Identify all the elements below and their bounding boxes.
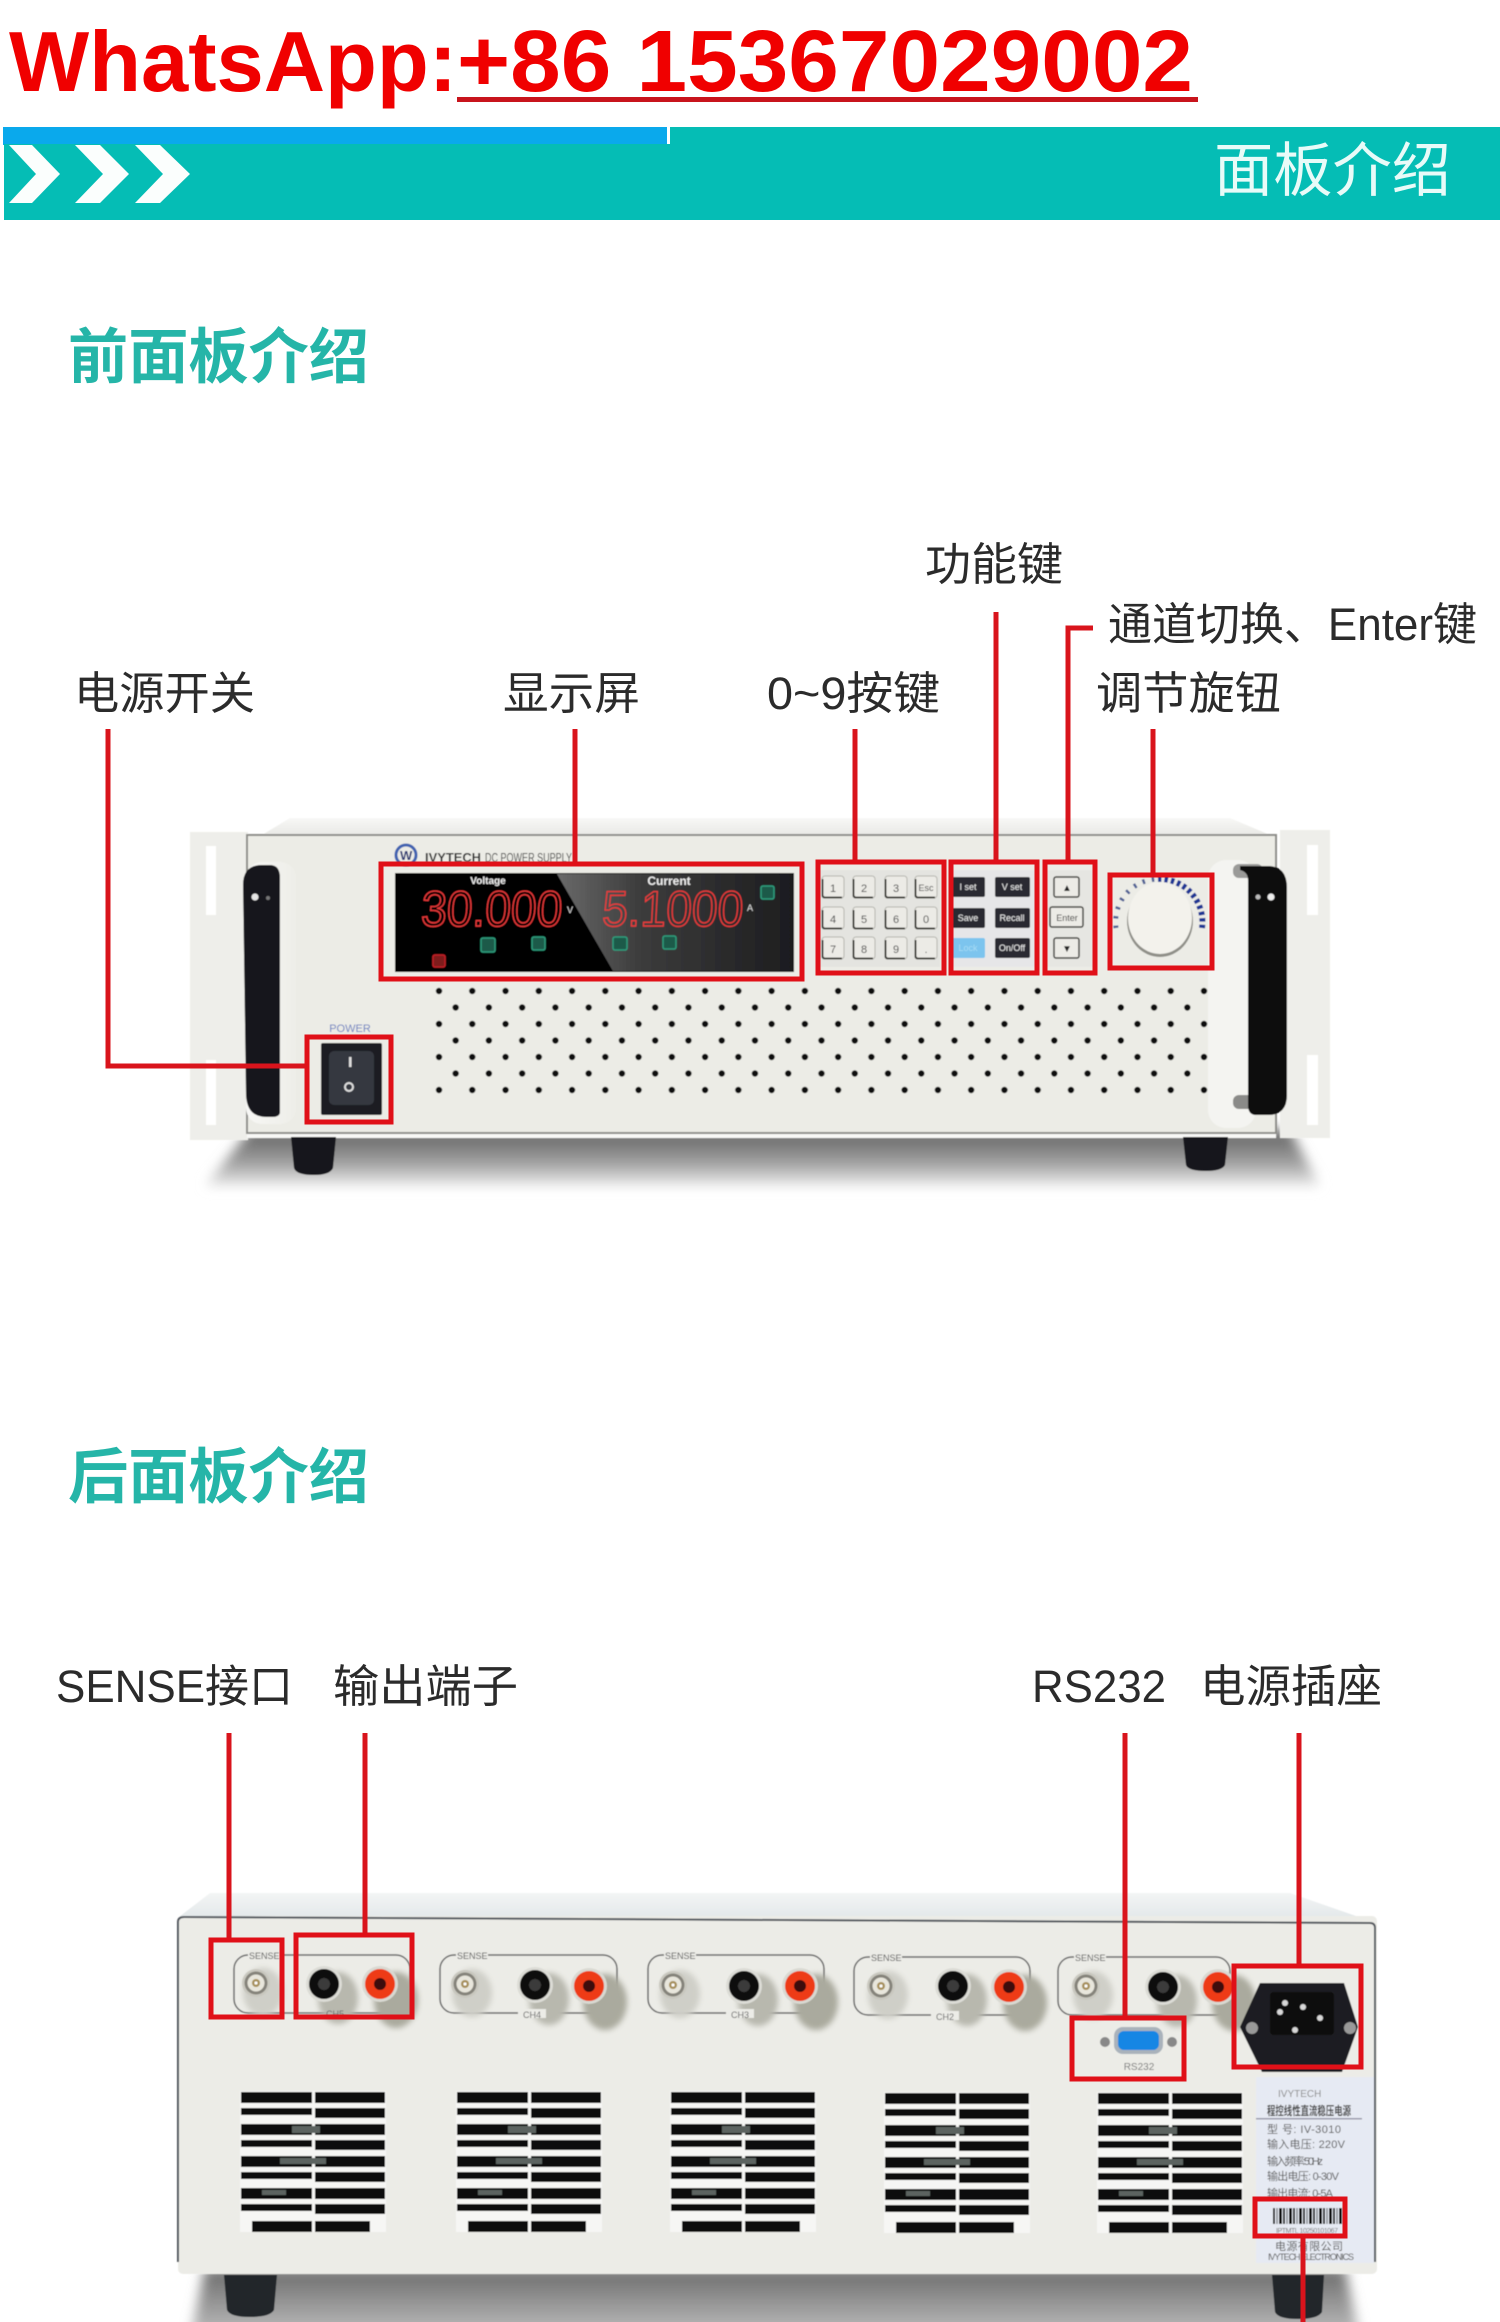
left handle: [243, 862, 296, 1124]
power label: POWER: [329, 1023, 371, 1035]
rating label: 输入频率: 50Hz: [1267, 2154, 1323, 2168]
function keys: V set: [1002, 882, 1023, 892]
rating label: [1256, 2077, 1374, 2263]
front right foot: [1183, 1137, 1228, 1171]
rear device body: [178, 1916, 1377, 2274]
rs232 connector: [1100, 2027, 1177, 2073]
label: power socket: 电源插座: [1200, 1661, 1382, 1712]
rear device top lid: [179, 1893, 1376, 1923]
ventilation dots: [430, 982, 1212, 1098]
channel 5 terminals: [234, 1950, 418, 2028]
channel 1 terminals: SENSE: [1075, 1953, 1106, 1963]
heading: rear panel: 后面板介绍: [68, 1444, 369, 1511]
rating label: IVYTECH: [1278, 2089, 1321, 2100]
navigation keys: Enter: [1056, 913, 1078, 923]
label: power switch: 电源开关: [74, 668, 255, 719]
keypad: 1: [830, 883, 836, 895]
front panel device photo: [190, 818, 1330, 1186]
keypad: 2: [861, 883, 867, 895]
keypad: 5: [861, 914, 867, 926]
channel 5 terminals: CH5: [326, 2009, 344, 2019]
rear vent 4: [884, 2092, 1030, 2233]
power socket: [1240, 1983, 1358, 2072]
channel 4 terminals: [440, 1950, 627, 2030]
label: function keys: 功能键: [925, 539, 1063, 590]
icon: banner chevrons: [9, 145, 190, 203]
label: adjust knob: 调节旋钮: [1096, 668, 1281, 719]
function keys: Recall: [999, 913, 1025, 923]
right handle: [1208, 860, 1287, 1128]
function keys: Lock: [958, 943, 978, 953]
front device faceplate: [247, 835, 1276, 1133]
heading: front panel: 前面板介绍: [68, 324, 369, 391]
label: output terminals: 输出端子: [333, 1661, 518, 1712]
whatsapp contact heading: WhatsApp:: [9, 15, 457, 110]
keypad: 3: [893, 883, 899, 895]
front right rack ear: [1280, 830, 1330, 1138]
whatsapp contact heading: [9, 13, 1198, 110]
rear vent 1: [240, 2091, 386, 2232]
front device shadow: [205, 1130, 1320, 1186]
label: channel switch and enter: 通道切换、Enter键: [1108, 599, 1477, 650]
function keys: I set: [959, 882, 977, 892]
banner title: 面板介绍: [1214, 138, 1451, 204]
keypad: 6: [893, 914, 899, 926]
channel 4 terminals: CH4: [523, 2010, 541, 2020]
channel 3 terminals: [648, 1950, 838, 2030]
keypad: 4: [830, 914, 836, 926]
section banner: [3, 127, 1500, 220]
units: [567, 903, 753, 915]
channel 2 terminals: [854, 1952, 1047, 2031]
rear right foot: [1272, 2275, 1324, 2319]
keypad: 9: [893, 944, 899, 956]
rating label: 程控线性直流稳压电源: [1267, 2103, 1351, 2118]
adjust knob: [1116, 879, 1202, 957]
function keys: Save: [958, 913, 978, 923]
rating label: 输出电流: 0-5A: [1267, 2186, 1334, 2200]
navigation keys: ▲: [1062, 883, 1072, 894]
keypad: .: [924, 944, 928, 956]
units: A: [747, 903, 753, 913]
rating label: 输入电压: 220V: [1267, 2137, 1346, 2151]
channel 3 terminals: CH3: [731, 2010, 749, 2020]
keypad: Esc: [918, 883, 934, 893]
rs232 connector: RS232: [1124, 2062, 1155, 2073]
brand logo: DC POWER SUPPLY: [485, 850, 572, 865]
function keys: [951, 870, 1036, 967]
display screen: [395, 873, 794, 972]
current reading: 5.1000: [601, 881, 745, 937]
highlight boxes: rear panel: [211, 1935, 1361, 2236]
highlight boxes: front panel: [307, 862, 1212, 1122]
front left rack ear: [190, 832, 248, 1140]
current label: Current: [647, 874, 691, 888]
callout lines: front panel: [108, 612, 1153, 1066]
whatsapp contact heading: +86 15367029002: [457, 13, 1193, 110]
keypad: [820, 870, 940, 967]
front left foot: [291, 1137, 336, 1175]
label: display: 显示屏: [503, 668, 640, 719]
rear vent 2: [456, 2091, 602, 2232]
keypad: 0: [923, 914, 929, 926]
brand logo: [396, 845, 572, 865]
rear vent 3: [670, 2091, 816, 2232]
label: number keys: 0~9按键: [767, 668, 940, 719]
brand logo: IVYTECH: [425, 850, 481, 865]
function keys: On/Off: [999, 943, 1026, 953]
keypad: 8: [861, 944, 867, 956]
channel 5 terminals: SENSE: [249, 1951, 280, 1961]
channel 3 terminals: SENSE: [665, 1951, 696, 1961]
power switch: [321, 1043, 382, 1115]
brand logo: W: [400, 848, 413, 863]
rating label: IVYTECH ELECTRONICS: [1268, 2252, 1354, 2262]
keypad: 7: [830, 944, 836, 956]
rear left foot: [224, 2275, 277, 2317]
label: rs232: RS232: [1032, 1661, 1166, 1712]
channel 1 terminals: [1058, 1952, 1256, 2031]
rear device shadow: [190, 2268, 1360, 2322]
indicator lights: [481, 886, 774, 952]
rating label: 输出电压: 0-30V: [1267, 2169, 1340, 2183]
channel 2 terminals: CH2: [936, 2012, 954, 2022]
barcode: IPTMTL 10250101067: [1276, 2228, 1338, 2235]
front device top lid: [262, 818, 1270, 835]
rating label: 型 号: IV-3010: [1267, 2122, 1341, 2136]
rating label: 电源有限公司: [1275, 2239, 1343, 2253]
rear panel device photo: [178, 1893, 1377, 2322]
units: V: [567, 905, 573, 915]
channel 2 terminals: SENSE: [871, 1953, 902, 1963]
navigation keys: [1046, 870, 1093, 967]
voltage reading: 30.000: [420, 881, 564, 937]
barcode: [1273, 2216, 1342, 2235]
label: sense port: SENSE接口: [56, 1661, 293, 1712]
voltage label: Voltage: [470, 876, 506, 887]
channel 4 terminals: SENSE: [457, 1951, 488, 1961]
callout lines: rear panel: [229, 1733, 1303, 2322]
navigation keys: ▼: [1062, 944, 1072, 955]
rear vent 5: [1097, 2092, 1243, 2233]
